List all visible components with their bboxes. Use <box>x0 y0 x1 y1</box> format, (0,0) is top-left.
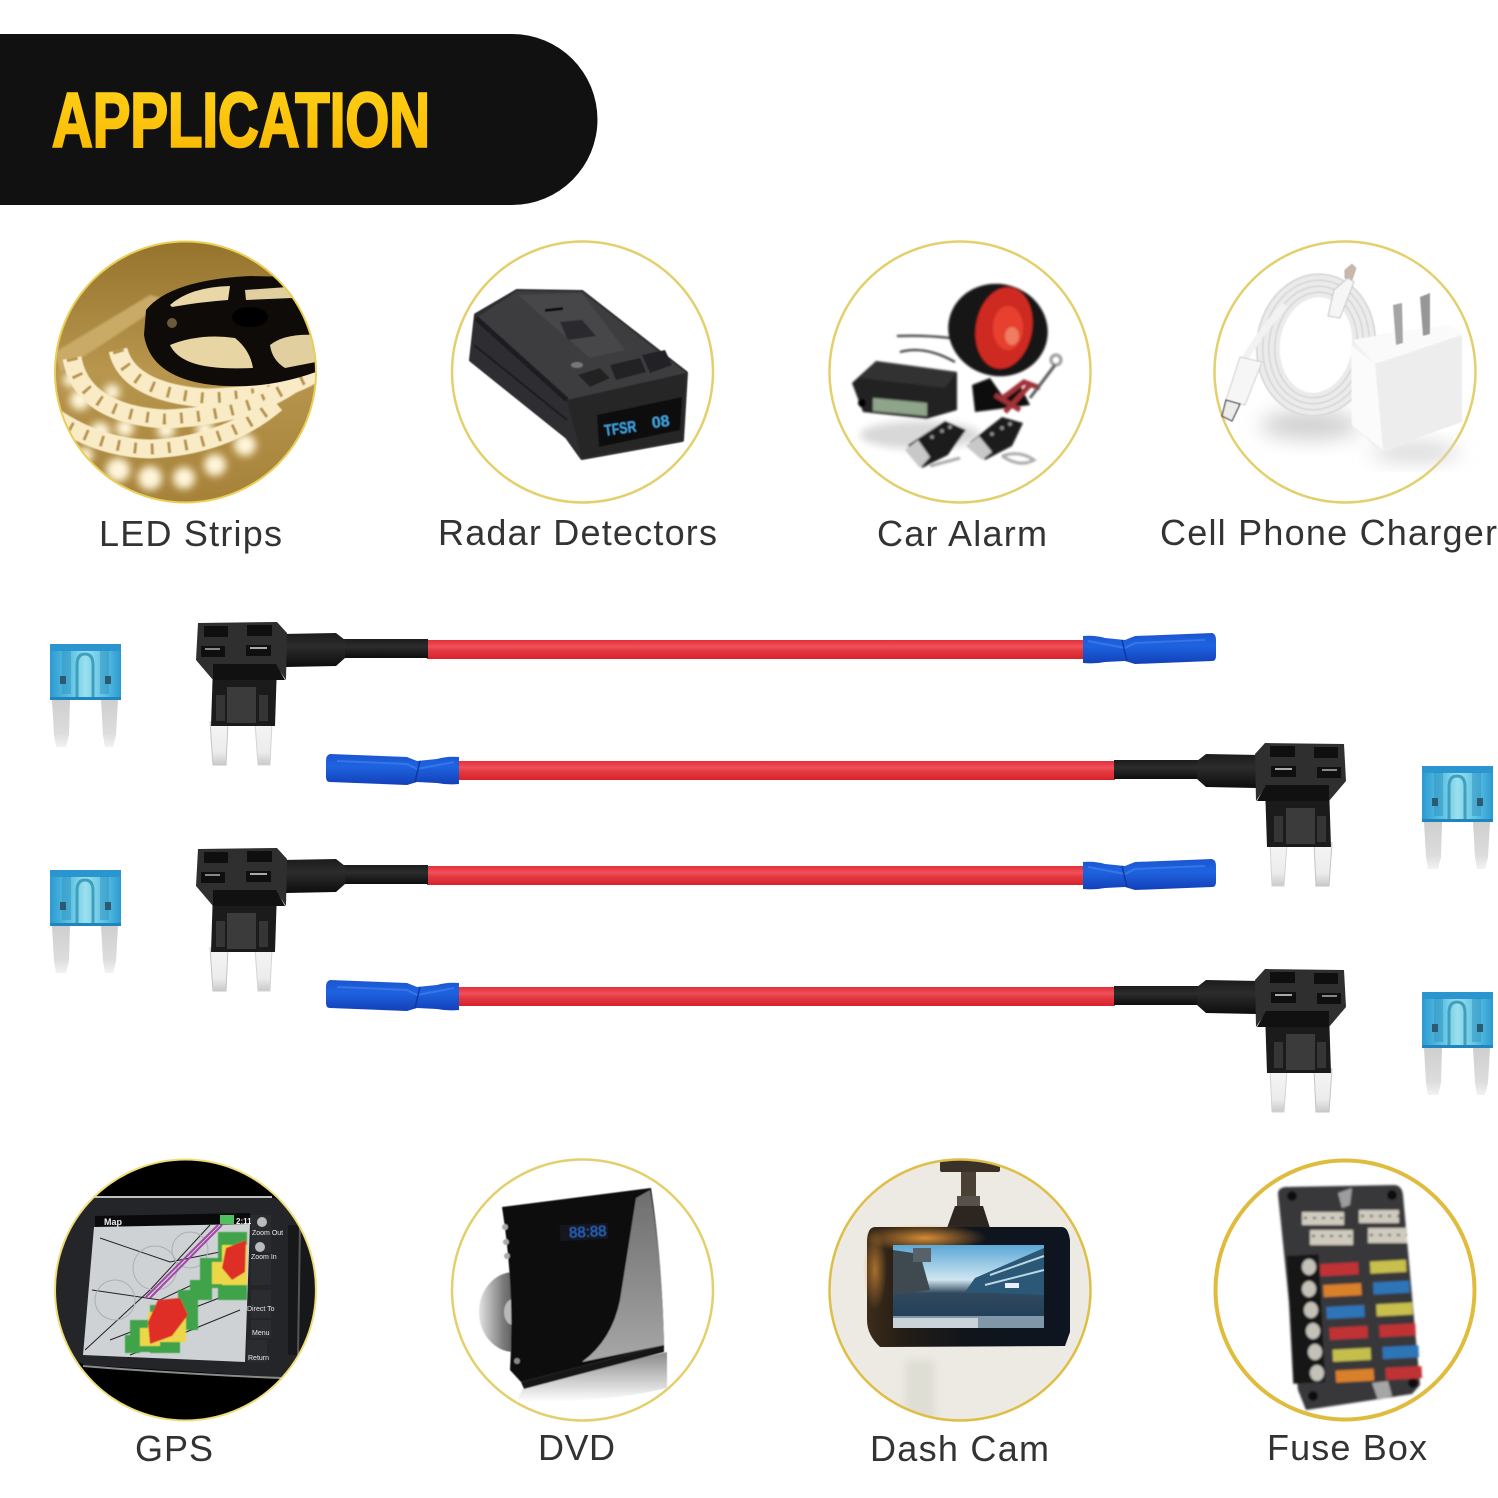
ring <box>55 1160 316 1420</box>
ring <box>1214 242 1476 502</box>
fuse tap wire 1 <box>196 622 1216 765</box>
image: radar detector <box>471 291 686 458</box>
fuse tap wire 2 <box>326 743 1346 886</box>
image: charger and cable <box>1222 264 1462 461</box>
mini blade fuse 1 <box>50 644 121 747</box>
panel: car alarm <box>830 242 1090 554</box>
image: car alarm kit <box>852 273 1061 468</box>
label: Car Alarm <box>877 513 1047 554</box>
label: Radar Detectors <box>438 512 717 553</box>
image: radar detector: 08 <box>651 413 671 432</box>
label: Fuse Box <box>1267 1427 1427 1468</box>
fuse tap wire 3 <box>196 848 1216 991</box>
mini blade fuse 4 <box>1422 992 1493 1095</box>
image: dash cam <box>825 1155 1095 1427</box>
image: GPS navigation screen <box>50 1155 320 1427</box>
ring <box>452 1160 713 1420</box>
image: GPS navigation screen: Direct To <box>247 1306 275 1313</box>
ring <box>452 242 713 502</box>
image: GPS navigation screen: Return <box>248 1355 269 1362</box>
label: Cell Phone Charger <box>1160 512 1497 553</box>
ring <box>830 1160 1090 1420</box>
image: GPS navigation screen: Menu <box>252 1330 270 1337</box>
ring <box>55 242 316 502</box>
label: GPS <box>135 1428 213 1469</box>
fuse tap wire 4 <box>326 969 1346 1112</box>
ring <box>830 242 1090 502</box>
panel: fuse box <box>1216 1160 1474 1468</box>
image: GPS navigation screen: Map <box>104 1217 123 1227</box>
panel: LED strips <box>50 236 320 554</box>
title: APPLICATION <box>52 78 430 164</box>
image: radar detector: TFSR <box>603 419 638 440</box>
label: LED Strips <box>99 513 282 554</box>
image: DVD player <box>479 1188 667 1402</box>
label: DVD <box>538 1427 615 1468</box>
mini blade fuse 3 <box>50 870 121 973</box>
panel: GPS <box>50 1155 320 1469</box>
ring <box>1216 1160 1474 1420</box>
image: fuse box <box>1278 1185 1422 1410</box>
image: GPS navigation screen: Zoom In <box>251 1254 277 1261</box>
image: LED strip reel <box>50 236 320 508</box>
panel: DVD <box>452 1160 713 1468</box>
mini blade fuse 2 <box>1422 766 1493 869</box>
label: Dash Cam <box>870 1428 1049 1469</box>
image: GPS navigation screen: 2:11 <box>236 1217 252 1226</box>
image: GPS navigation screen: Zoom Out <box>252 1230 283 1237</box>
image: DVD player: 88:88 <box>569 1223 607 1242</box>
header banner <box>0 34 597 205</box>
panel: radar detectors <box>438 242 717 553</box>
panel: dash cam <box>825 1155 1095 1469</box>
panel: cell phone charger <box>1160 242 1497 553</box>
